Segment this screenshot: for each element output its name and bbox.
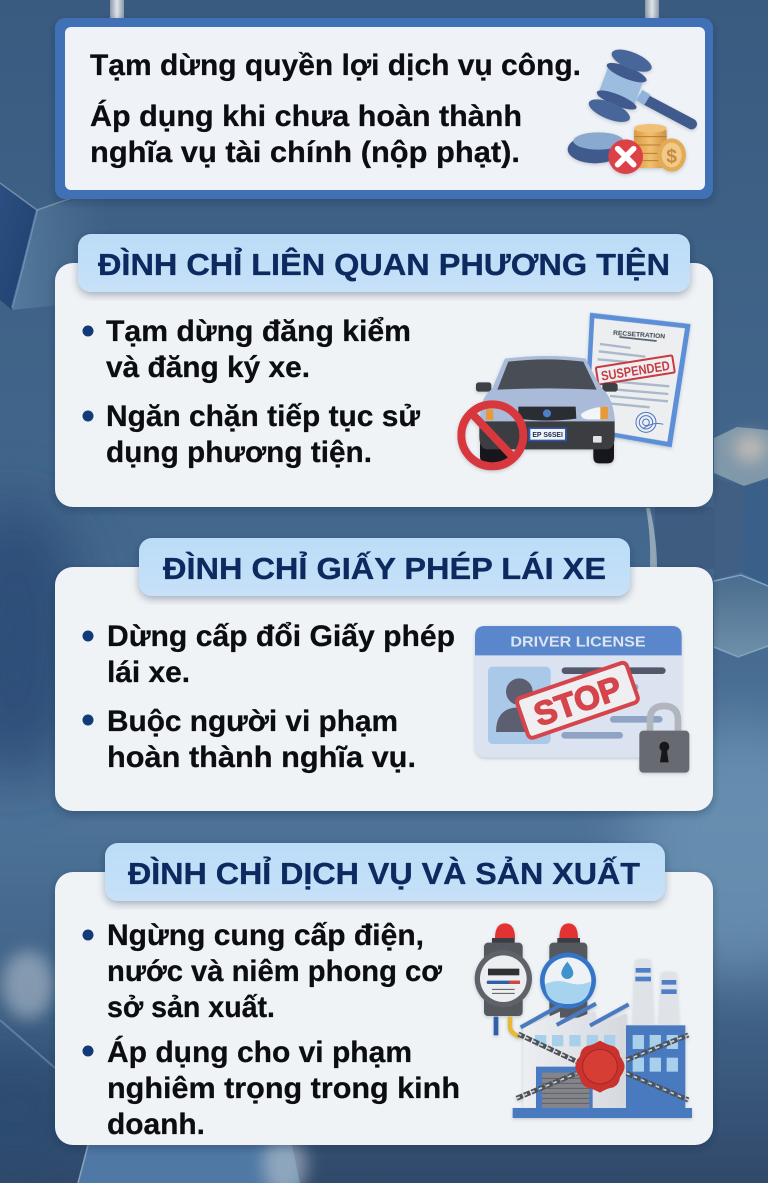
- panel: top notice: [55, 18, 713, 199]
- text block: services bullets: Áp dụng cho vi phạm: [107, 1035, 412, 1069]
- text block: license bullets: Dừng cấp đổi Giấy phép: [107, 620, 455, 653]
- heading: services and production suspension: [105, 843, 665, 901]
- text block: license bullets: [82, 620, 455, 774]
- text block: top notice: nghĩa vụ tài chính (nộp phạt).: [90, 136, 520, 169]
- panel: vehicle suspension: [55, 234, 713, 507]
- text block: vehicle bullets: dụng phương tiện.: [106, 436, 372, 469]
- heading: services and production suspension: ĐÌNH CHỈ DỊCH VỤ VÀ SẢN XUẤT: [128, 856, 640, 891]
- icon: sealed factory with utility meters: [475, 923, 692, 1118]
- text block: vehicle bullets: và đăng ký xe.: [106, 351, 310, 384]
- heading: vehicle suspension: [78, 234, 690, 292]
- text block: vehicle bullets: Tạm dừng đăng kiểm: [106, 315, 411, 348]
- text block: services bullets: doanh.: [107, 1108, 205, 1141]
- icon: suspended car and registration: RECSETRATION: [613, 330, 665, 340]
- icon: driver license with stop stamp and padlock: DRIVER LICENSE: [510, 635, 646, 651]
- panel: driver license suspension: [55, 538, 713, 811]
- text block: services bullets: Ngừng cung cấp điện,: [107, 919, 424, 952]
- text block: license bullets: lái xe.: [107, 656, 190, 689]
- text block: services bullets: nước và niêm phong cơ: [107, 955, 442, 988]
- icon: gavel and coins: [568, 45, 692, 174]
- icon: suspended car and registration: [461, 313, 691, 466]
- text block: vehicle bullets: Ngăn chặn tiếp tục sử: [106, 400, 421, 433]
- heading: vehicle suspension: ĐÌNH CHỈ LIÊN QUAN PHƯƠNG TIỆN: [98, 246, 670, 282]
- text block: services bullets: [82, 919, 460, 1141]
- panel: services and production suspension: [55, 843, 713, 1145]
- icon: driver license with stop stamp and padlock: STOP: [529, 670, 627, 734]
- icon: gavel and coins: $: [666, 147, 677, 168]
- text block: top notice: Áp dụng khi chưa hoàn thành: [90, 99, 522, 133]
- text block: license bullets: hoàn thành nghĩa vụ.: [107, 741, 416, 774]
- text block: services bullets: nghiêm trọng trong kinh: [107, 1072, 460, 1105]
- text block: services bullets: sở sản xuất.: [107, 991, 275, 1024]
- text block: vehicle bullets: [82, 315, 421, 469]
- text block: top notice: [90, 49, 581, 169]
- heading: driver license suspension: ĐÌNH CHỈ GIẤY PHÉP LÁI XE: [163, 551, 606, 586]
- text block: license bullets: Buộc người vi phạm: [107, 705, 398, 738]
- icon: suspended car and registration: EP S6SEI: [532, 432, 563, 439]
- heading: driver license suspension: [139, 538, 630, 596]
- hanging poles: [110, 0, 659, 20]
- icon: driver license with stop stamp and padlock: [475, 626, 689, 773]
- text block: top notice: Tạm dừng quyền lợi dịch vụ công.: [90, 49, 581, 82]
- icon: suspended car and registration: SUSPENDED: [600, 358, 671, 384]
